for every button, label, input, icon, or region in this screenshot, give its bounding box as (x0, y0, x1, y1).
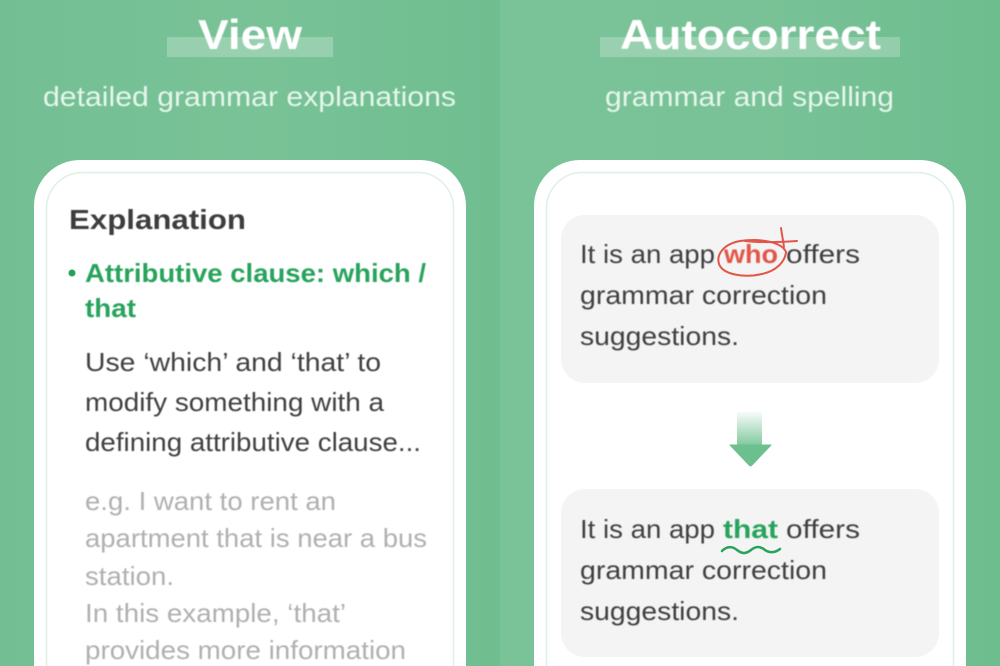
text: incorrect sentence: who (723, 239, 778, 269)
text: corrected sentence: offers (786, 514, 860, 544)
panel: Autocorrect (500, 0, 1000, 666)
subtitle: grammar and spelling: grammar and spelling (605, 81, 894, 112)
sentence box: before (561, 215, 939, 383)
text: corrected sentence (580, 514, 860, 626)
text: grey example: e.g. I want to rent an (85, 486, 336, 516)
icon: red circle and strike mark (718, 228, 797, 276)
sentence box: after (561, 489, 939, 657)
box background (561, 489, 939, 657)
card outer frame (534, 160, 966, 666)
text: explanation body: modify something with a (85, 387, 385, 417)
text: corrected sentence: It is an app (580, 514, 715, 544)
heading highlight: View (167, 37, 333, 57)
arrow head (730, 445, 771, 466)
text: explanation body (85, 347, 421, 457)
text: grey example: station. (85, 561, 174, 591)
card outer frame (34, 160, 466, 666)
panel: View (0, 0, 500, 666)
box background (561, 215, 939, 383)
text: corrected sentence: that (723, 514, 778, 544)
icon: green squiggle underline (722, 547, 780, 553)
panel background: View (0, 0, 500, 666)
arrow shaft (737, 412, 762, 445)
phone card: correction (534, 160, 966, 666)
text: incorrect sentence: grammar correction (580, 280, 827, 310)
text: green clause title: that (85, 293, 136, 323)
card inner outline (546, 172, 954, 666)
text: corrected sentence: grammar correction (580, 555, 827, 585)
text: incorrect sentence: suggestions. (580, 321, 739, 351)
text: explanation body: Use ‘which’ and ‘that’ to (85, 347, 381, 377)
text: green clause title (85, 258, 426, 323)
heading highlight: Autocorrect (600, 37, 900, 57)
icon: down arrow (730, 412, 771, 466)
text: incorrect sentence: offers (786, 239, 860, 269)
text: corrected sentence: suggestions. (580, 596, 739, 626)
text: grey example: apartment that is near a bus (85, 523, 427, 553)
card inner outline (46, 172, 454, 666)
heading: Autocorrect: Autocorrect (620, 11, 881, 58)
text: incorrect sentence: It is an app (580, 239, 715, 269)
text: Explanation heading: Explanation (69, 204, 246, 235)
text: grey example: provides more information (85, 635, 406, 665)
panel background: Autocorrect (500, 0, 1000, 666)
text: incorrect sentence (580, 239, 860, 351)
text: grey example (85, 486, 427, 665)
heading: View: View (198, 11, 302, 58)
phone card: explanation (34, 160, 466, 666)
text: green clause title: Attributive clause: which / (85, 258, 426, 288)
bullet (68, 270, 76, 276)
text: explanation body: defining attributive clause... (85, 427, 421, 457)
text: grey example: In this example, ‘that’ (85, 598, 346, 628)
subtitle: detailed grammar explanations: detailed grammar explanations (43, 81, 456, 112)
